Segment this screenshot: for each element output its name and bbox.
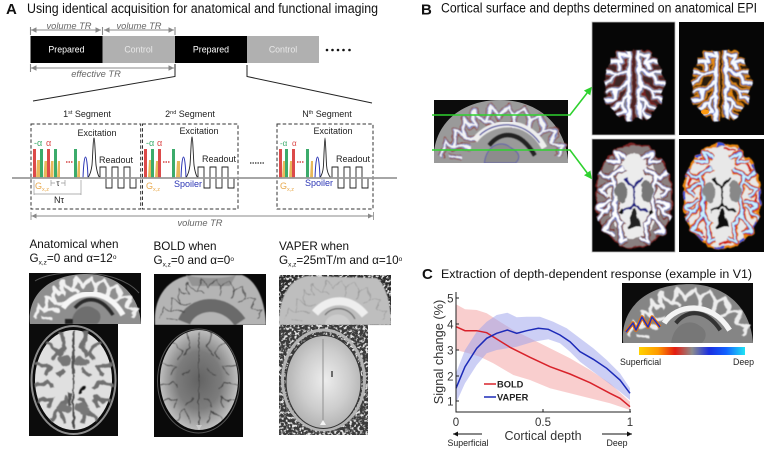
depth direction arrows — [447, 434, 632, 448]
TR block sequence: Control — [269, 44, 297, 54]
colour bar: Superficial — [620, 357, 661, 367]
image captions: =0 and α=12 — [47, 252, 113, 265]
image captions: Anatomical when — [30, 238, 119, 251]
gradient labels: x,z — [287, 187, 294, 193]
image: VAPER sagittal — [279, 275, 391, 325]
pulse sequence diagram: N — [302, 109, 309, 119]
image captions: G — [279, 254, 288, 267]
image: top axial surfaces — [592, 22, 675, 135]
timeline axis — [12, 177, 397, 179]
gradient labels: Spoiler — [174, 179, 202, 189]
image captions: o — [230, 256, 234, 263]
gradient labels: τ — [56, 179, 60, 188]
segment N pulses — [279, 138, 368, 188]
image: V1 inset sagittal — [622, 283, 753, 343]
tick labels: 4 — [447, 320, 454, 332]
image: BOLD sagittal — [154, 274, 266, 325]
gradient labels: G — [280, 181, 287, 191]
colour bar — [620, 347, 754, 367]
tick labels: 3 — [447, 346, 454, 358]
image captions: =25mT/m and α=10 — [296, 254, 399, 267]
image: anatomical axial — [29, 324, 118, 436]
panel: C depth response — [422, 266, 754, 448]
tick labels: 0 — [453, 417, 459, 429]
volume TR arrows: volume TR — [47, 21, 92, 31]
pulse sequence diagram: 2 — [165, 109, 170, 119]
pulse sequence diagram: Readout — [99, 155, 134, 165]
image: top axial depth colours — [679, 22, 764, 135]
panel letter C: C — [422, 266, 433, 283]
gradient labels: G — [35, 181, 42, 191]
image: anatomical sagittal — [29, 272, 141, 324]
BOLD confidence band — [456, 304, 630, 410]
overall volume TR arrow: volume TR — [178, 218, 223, 228]
gradient labels: x,z — [42, 187, 49, 193]
pulse sequence diagram — [12, 109, 397, 209]
image captions: G — [30, 252, 39, 265]
zoom lines — [33, 64, 372, 103]
line chart — [431, 292, 633, 448]
tick labels: 1 — [447, 396, 454, 408]
panel letter B: B — [421, 2, 432, 18]
TR block sequence: Prepared — [193, 44, 229, 54]
segment 2 pulses: -α — [146, 138, 154, 148]
TR block sequence — [30, 36, 351, 63]
pulse sequence diagram: Readout — [202, 154, 237, 164]
y axis label: Signal change (%) — [431, 300, 446, 404]
image captions: o — [113, 254, 117, 261]
pulse sequence diagram: th — [309, 110, 313, 116]
pulse sequence diagram: Readout — [336, 154, 371, 164]
image captions: G — [154, 254, 163, 267]
image: bottom axial depth colours — [679, 139, 764, 252]
panel: A acquisition — [6, 1, 403, 437]
heading C: Extraction of depth-dependent response (example in V1) — [441, 267, 752, 281]
TR block sequence: Prepared — [48, 44, 85, 54]
pulse sequence diagram: nd — [170, 110, 176, 116]
segment N pulses: -α — [280, 139, 288, 148]
segment N pulses: α — [292, 139, 297, 148]
tick labels: 0.5 — [535, 417, 551, 429]
image captions: o — [399, 256, 403, 263]
volume TR arrows: effective TR — [71, 69, 121, 79]
pulse sequence diagram: 1 — [63, 109, 68, 119]
pulse sequence diagram: Excitation — [179, 126, 219, 136]
image captions: BOLD when — [154, 240, 217, 253]
pulse sequence diagram: α — [46, 138, 51, 148]
image captions: x,z — [39, 260, 47, 266]
gradient labels — [34, 163, 333, 205]
gradient labels: Nτ — [54, 195, 64, 205]
segment 2 pulses: α — [157, 138, 162, 148]
pulse sequence diagram: Segment — [313, 109, 352, 119]
x axis label: Cortical depth — [504, 429, 582, 443]
image: anatomical EPI sagittal with surfaces — [434, 100, 568, 164]
volume TR arrows: volume TR — [117, 21, 162, 31]
legend: VAPER — [497, 392, 529, 402]
image captions: =0 and α=0 — [171, 254, 231, 267]
colour bar: Deep — [733, 357, 754, 367]
pulse sequence diagram: -α — [34, 138, 42, 148]
depth direction arrows: Deep — [606, 438, 628, 448]
heading A: Using identical acquisition for anatomical and functional imaging — [27, 1, 378, 16]
panel: B cortical surface — [421, 0, 764, 252]
tick labels: 1 — [627, 417, 633, 429]
pulse sequence diagram: Segment — [72, 109, 111, 119]
volume TR arrows — [30, 21, 175, 79]
segment 2 pulses — [144, 137, 234, 188]
image captions — [30, 238, 403, 268]
VAPER line — [456, 328, 630, 393]
gradient labels: x,z — [153, 187, 160, 193]
gradient labels: G — [146, 181, 153, 191]
tick labels: 2 — [447, 372, 454, 384]
image: BOLD axial — [154, 325, 243, 437]
image captions: VAPER when — [279, 240, 349, 253]
pulse sequence diagram: Excitation — [313, 126, 353, 136]
gradient labels: Spoiler — [305, 178, 333, 188]
image: VAPER axial — [279, 325, 368, 437]
image: bottom axial surfaces — [592, 139, 675, 252]
pulse sequence diagram: st — [68, 110, 73, 116]
pulse sequence diagram: Segment — [176, 109, 215, 119]
BOLD line — [456, 327, 630, 407]
panel letter A: A — [6, 1, 17, 18]
image captions: x,z — [163, 262, 171, 268]
legend — [484, 380, 529, 402]
tick labels — [447, 294, 633, 429]
image captions: x,z — [288, 262, 296, 268]
VAPER confidence band — [456, 313, 630, 403]
axes — [456, 292, 631, 412]
legend: BOLD — [497, 380, 524, 390]
overall volume TR arrow — [31, 212, 374, 228]
pulse sequence diagram: Excitation — [77, 128, 117, 138]
depth direction arrows: Superficial — [447, 438, 489, 448]
tick labels: 5 — [447, 294, 454, 306]
TR block sequence: Control — [124, 44, 153, 54]
green section arrows — [432, 88, 591, 178]
